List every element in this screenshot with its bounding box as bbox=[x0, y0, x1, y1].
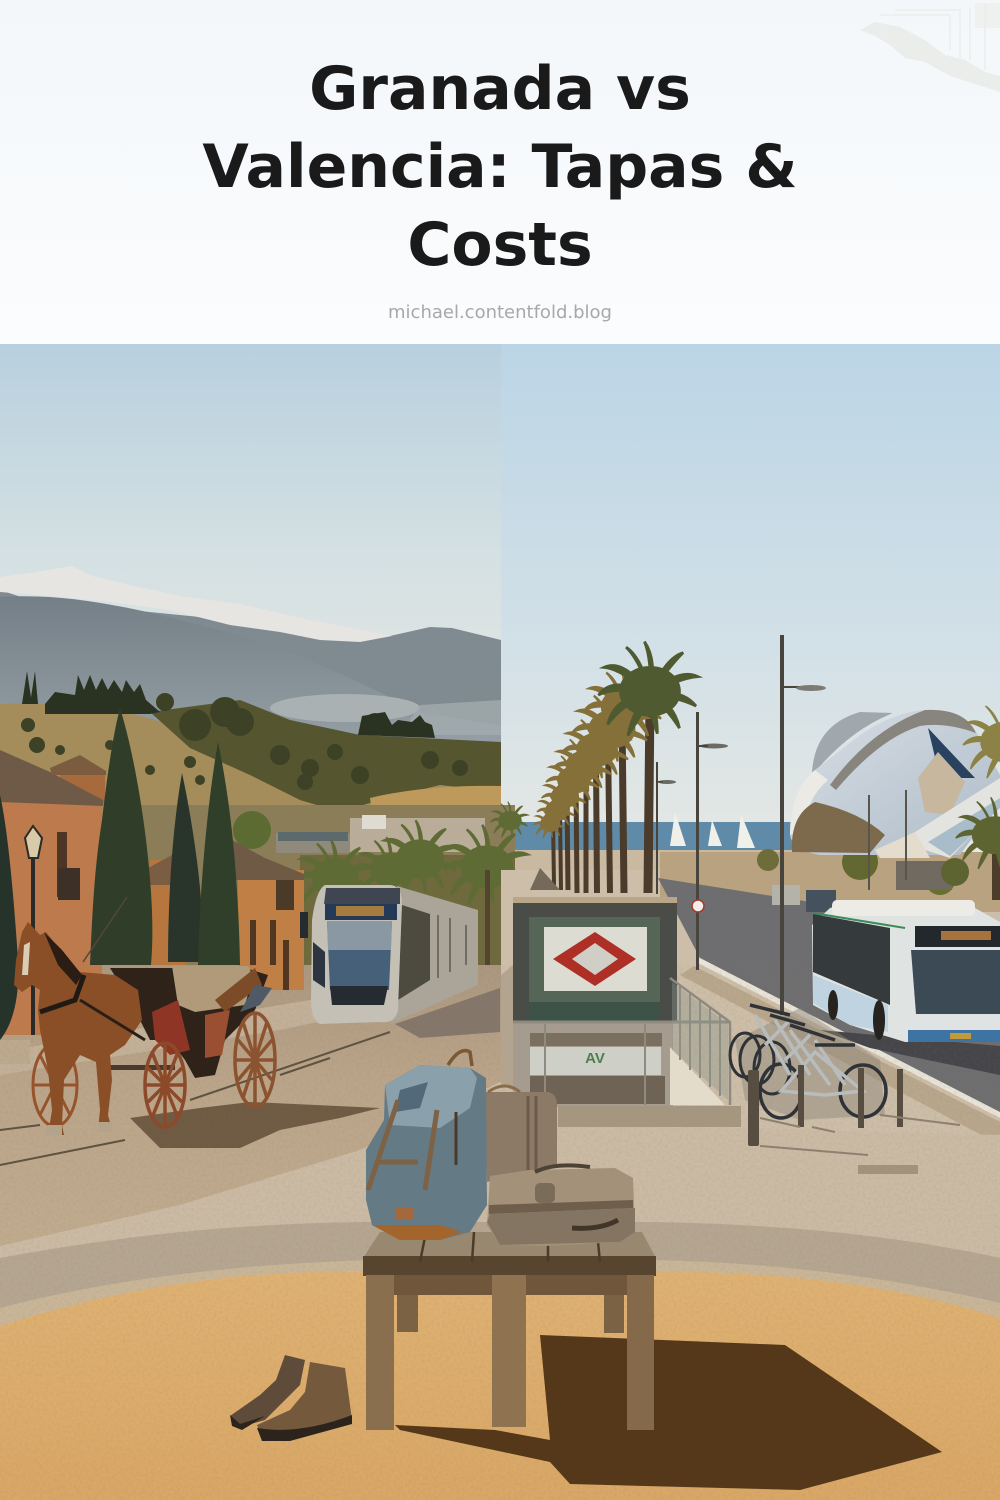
flat suitcase bbox=[487, 1165, 635, 1246]
carriage far wheel bbox=[33, 1044, 77, 1126]
hiking boots bbox=[230, 1355, 352, 1441]
title: Valencia: Tapas & bbox=[202, 132, 798, 202]
tram bbox=[300, 885, 478, 1024]
wooden bench bbox=[363, 1232, 656, 1430]
horse-drawn carriage bbox=[14, 897, 275, 1135]
railings bbox=[513, 978, 730, 1105]
Granada cypress trees bbox=[0, 708, 240, 1040]
metro sign bbox=[544, 927, 647, 991]
faint corner decoration bbox=[860, 3, 1000, 92]
Valencia right-edge palms bbox=[941, 702, 1000, 900]
stairwell wall bbox=[513, 1022, 673, 1107]
cypress row on the hill bbox=[22, 671, 160, 714]
carriage rear wheel bbox=[235, 1013, 275, 1107]
sandy plaza bbox=[0, 1272, 1000, 1500]
light paved plaza bbox=[0, 1082, 1000, 1262]
carriage body bbox=[110, 968, 268, 1078]
metro entrance bbox=[501, 897, 741, 1127]
street lamp bbox=[25, 826, 42, 1035]
Granada buildings bbox=[0, 750, 304, 1035]
backpack bbox=[366, 1051, 487, 1240]
parked bicycles bbox=[730, 1005, 886, 1120]
palm trunks bbox=[553, 700, 650, 893]
upright suitcase bbox=[484, 1086, 557, 1182]
Valencia palm row bbox=[530, 642, 698, 893]
Valencia street lamps bbox=[656, 635, 826, 1015]
Valencia background gardens bbox=[660, 844, 1000, 912]
surface texture bbox=[0, 965, 1000, 1500]
header panel bbox=[0, 0, 1000, 344]
title: Costs bbox=[407, 210, 593, 280]
curb of the ring bbox=[0, 1260, 1000, 1328]
site url: michael.contentfold.blog bbox=[388, 302, 612, 323]
entrance curb bbox=[558, 1106, 741, 1127]
manhole cover bbox=[858, 1165, 918, 1174]
Valencia sea with sailboats bbox=[501, 812, 801, 890]
city bus bbox=[812, 900, 1000, 1042]
bench shadow bbox=[395, 1335, 942, 1490]
horse bbox=[14, 922, 145, 1135]
panel: Granada sky bbox=[0, 344, 501, 724]
metro logo: AV bbox=[585, 1050, 605, 1067]
Granada palm trees bbox=[296, 802, 528, 965]
title: Granada vs bbox=[309, 54, 691, 124]
panel: Valencia sky bbox=[501, 344, 1000, 884]
pavement and cobbled street bbox=[0, 965, 525, 1265]
bollard shadows bbox=[760, 1115, 960, 1155]
Granada hillside bbox=[0, 671, 501, 860]
carriage shadow on the street bbox=[130, 1102, 380, 1148]
Valencia opera house bbox=[790, 710, 1000, 890]
cobbled ring bbox=[0, 1222, 1000, 1310]
carriage front wheel bbox=[145, 1043, 185, 1127]
title bbox=[202, 54, 798, 280]
stairs bbox=[670, 1047, 725, 1105]
bollards bbox=[748, 1065, 903, 1146]
Granada distant buildings bbox=[130, 805, 515, 970]
Valencia sidewalk bbox=[501, 870, 1000, 1265]
Granada snowy mountains bbox=[0, 566, 501, 760]
Valencia road bbox=[658, 878, 1000, 1145]
